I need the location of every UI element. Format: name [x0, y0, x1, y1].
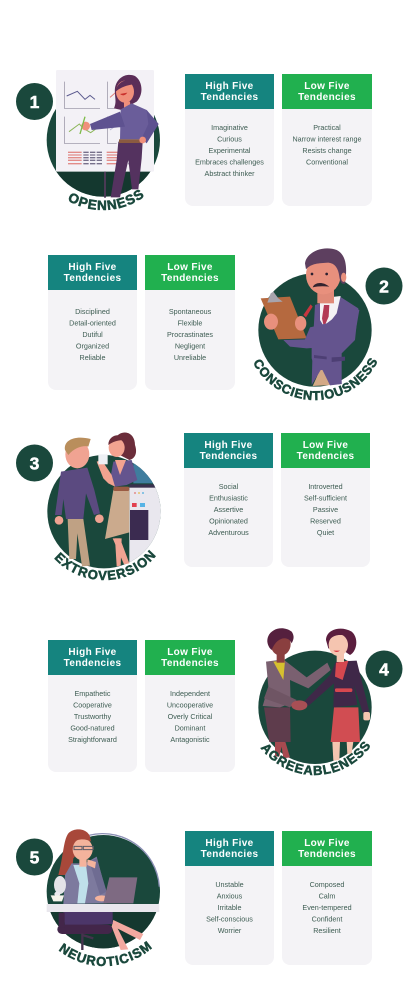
- panel: conscientiousness low five: Procrastinates: [167, 330, 213, 339]
- panel: openness low five: Low Five: [304, 81, 350, 92]
- panel: neuroticism high five: Irritable: [218, 903, 241, 912]
- panel: extroversion low five: Quiet: [317, 528, 334, 537]
- panel: extroversion high five: High Five: [204, 440, 253, 451]
- number badge 2: [366, 268, 402, 304]
- heading: conscientiousness: CONSCIENTIOUSNESS: [254, 358, 377, 400]
- number badge 4: 4: [379, 659, 389, 679]
- panel: conscientiousness high five: Tendencies: [64, 273, 121, 284]
- panel: neuroticism low five: Composed: [310, 880, 344, 889]
- panel: agreeableness low five: [145, 640, 235, 772]
- illustration: extroversion at water cooler: [47, 433, 163, 568]
- panel: openness low five: Practical: [313, 123, 341, 132]
- panel: extroversion low five: Self-sufficient: [304, 494, 347, 502]
- panel: conscientiousness high five: Reliable: [80, 353, 105, 362]
- panel: neuroticism high five: Self-conscious: [206, 914, 253, 924]
- panel: agreeableness low five: Tendencies: [161, 658, 219, 669]
- panel: conscientiousness low five: [145, 255, 235, 390]
- panel: extroversion low five: Introverted: [308, 482, 343, 491]
- panel: agreeableness high five: Empathetic: [75, 689, 111, 698]
- illustration: agreeableness handshake: [258, 628, 372, 764]
- panel: agreeableness low five: Independent: [170, 689, 210, 698]
- panel: agreeableness high five: Trustworthy: [74, 712, 112, 721]
- panel: openness low five: Tendencies: [298, 92, 356, 103]
- panel: conscientiousness high five: Detail-oriented: [69, 318, 116, 328]
- panel: extroversion high five: Social: [219, 482, 239, 491]
- panel: openness high five: Experimental: [209, 146, 251, 155]
- panel: neuroticism low five: Confident: [312, 914, 342, 924]
- panel: extroversion low five: Low Five: [303, 440, 348, 451]
- panel: openness high five: Tendencies: [201, 92, 258, 103]
- panel: neuroticism low five: Even-tempered: [302, 903, 352, 912]
- panel: neuroticism high five: Anxious: [217, 892, 243, 900]
- number badge 5: [16, 838, 53, 876]
- panel: extroversion high five: Assertive: [214, 505, 243, 514]
- number badge 4: [366, 650, 402, 688]
- panel: extroversion low five: Reserved: [310, 516, 341, 526]
- panel: conscientiousness high five: Organized: [76, 342, 109, 350]
- panel: neuroticism low five: Tendencies: [298, 849, 356, 860]
- panel: conscientiousness high five: High Five: [68, 262, 117, 273]
- panel: neuroticism high five: [185, 831, 274, 965]
- panel: extroversion low five: [281, 433, 370, 567]
- panel: neuroticism low five: Low Five: [304, 838, 350, 849]
- panel: openness high five: Imaginative: [211, 123, 248, 132]
- number badge 3: [16, 444, 53, 482]
- panel: agreeableness high five: Cooperative: [73, 700, 112, 710]
- number badge 5: 5: [30, 847, 40, 867]
- panel: openness high five: Embraces challenges: [195, 158, 264, 166]
- panel: neuroticism high five: Worrier: [218, 926, 242, 935]
- panel: agreeableness low five: Antagonistic: [170, 735, 210, 744]
- panel: neuroticism high five: Tendencies: [201, 849, 258, 860]
- panel: openness high five: Curious: [217, 134, 242, 144]
- panel: agreeableness low five: Dominant: [175, 724, 205, 732]
- panel: openness high five: High Five: [205, 81, 254, 92]
- panel: conscientiousness low five: Unreliable: [174, 353, 206, 362]
- panel: openness low five: Narrow interest range: [292, 134, 362, 144]
- number badge 3: 3: [30, 453, 40, 473]
- panel: openness low five: Conventional: [306, 158, 348, 166]
- number badge 1: [16, 83, 53, 120]
- panel: openness high five: Abstract thinker: [205, 169, 255, 178]
- illustration: conscientiousness man with clipboard: [258, 248, 372, 387]
- panel: neuroticism low five: [282, 831, 372, 965]
- panel: agreeableness high five: Good-natured: [70, 724, 115, 732]
- panel: extroversion high five: Enthusiastic: [209, 494, 248, 502]
- panel: neuroticism high five: Unstable: [215, 880, 244, 889]
- panel: conscientiousness low five: Tendencies: [161, 273, 219, 284]
- heading: openness: OPENNESS: [68, 190, 144, 210]
- panel: neuroticism low five: Resilient: [313, 926, 341, 935]
- panel: agreeableness high five: [48, 640, 137, 772]
- panel: agreeableness high five: Tendencies: [64, 658, 121, 669]
- heading: agreeableness: AGREEABLENESS: [260, 742, 370, 776]
- number badge 2: 2: [379, 276, 389, 296]
- panel: neuroticism low five: Calm: [319, 892, 335, 900]
- panel: conscientiousness high five: [48, 255, 137, 390]
- number badge 1: 1: [30, 92, 40, 112]
- illustration: openness presenter: [47, 70, 160, 198]
- panel: extroversion low five: Tendencies: [297, 451, 354, 462]
- panel: conscientiousness low five: Low Five: [167, 262, 213, 273]
- panel: neuroticism high five: High Five: [205, 838, 254, 849]
- panel: extroversion high five: Opinionated: [209, 516, 248, 526]
- panel: conscientiousness low five: Flexible: [178, 318, 202, 328]
- panel: extroversion high five: Adventurous: [208, 528, 249, 537]
- panel: conscientiousness low five: Spontaneous: [169, 307, 212, 316]
- panel: openness low five: Resists change: [302, 146, 352, 155]
- panel: openness low five: [282, 74, 372, 206]
- heading: extroversion: EXTROVERSION: [54, 550, 156, 580]
- panel: agreeableness high five: Straightforward: [68, 735, 117, 744]
- panel: conscientiousness low five: Negligent: [175, 342, 205, 350]
- panel: openness high five: [185, 74, 274, 206]
- panel: agreeableness high five: High Five: [68, 647, 117, 658]
- panel: conscientiousness high five: Dutiful: [82, 330, 103, 339]
- panel: extroversion high five: Tendencies: [200, 451, 257, 462]
- illustration: neuroticism woman at desk: [47, 829, 160, 950]
- panel: extroversion low five: Passive: [313, 505, 338, 514]
- heading: neuroticism: NEUROTICISM: [58, 940, 152, 966]
- panel: conscientiousness high five: Disciplined: [75, 307, 110, 316]
- panel: agreeableness low five: Overly Critical: [168, 712, 213, 721]
- panel: extroversion high five: [184, 433, 273, 567]
- panel: agreeableness low five: Uncooperative: [167, 700, 213, 710]
- panel: agreeableness low five: Low Five: [167, 647, 213, 658]
